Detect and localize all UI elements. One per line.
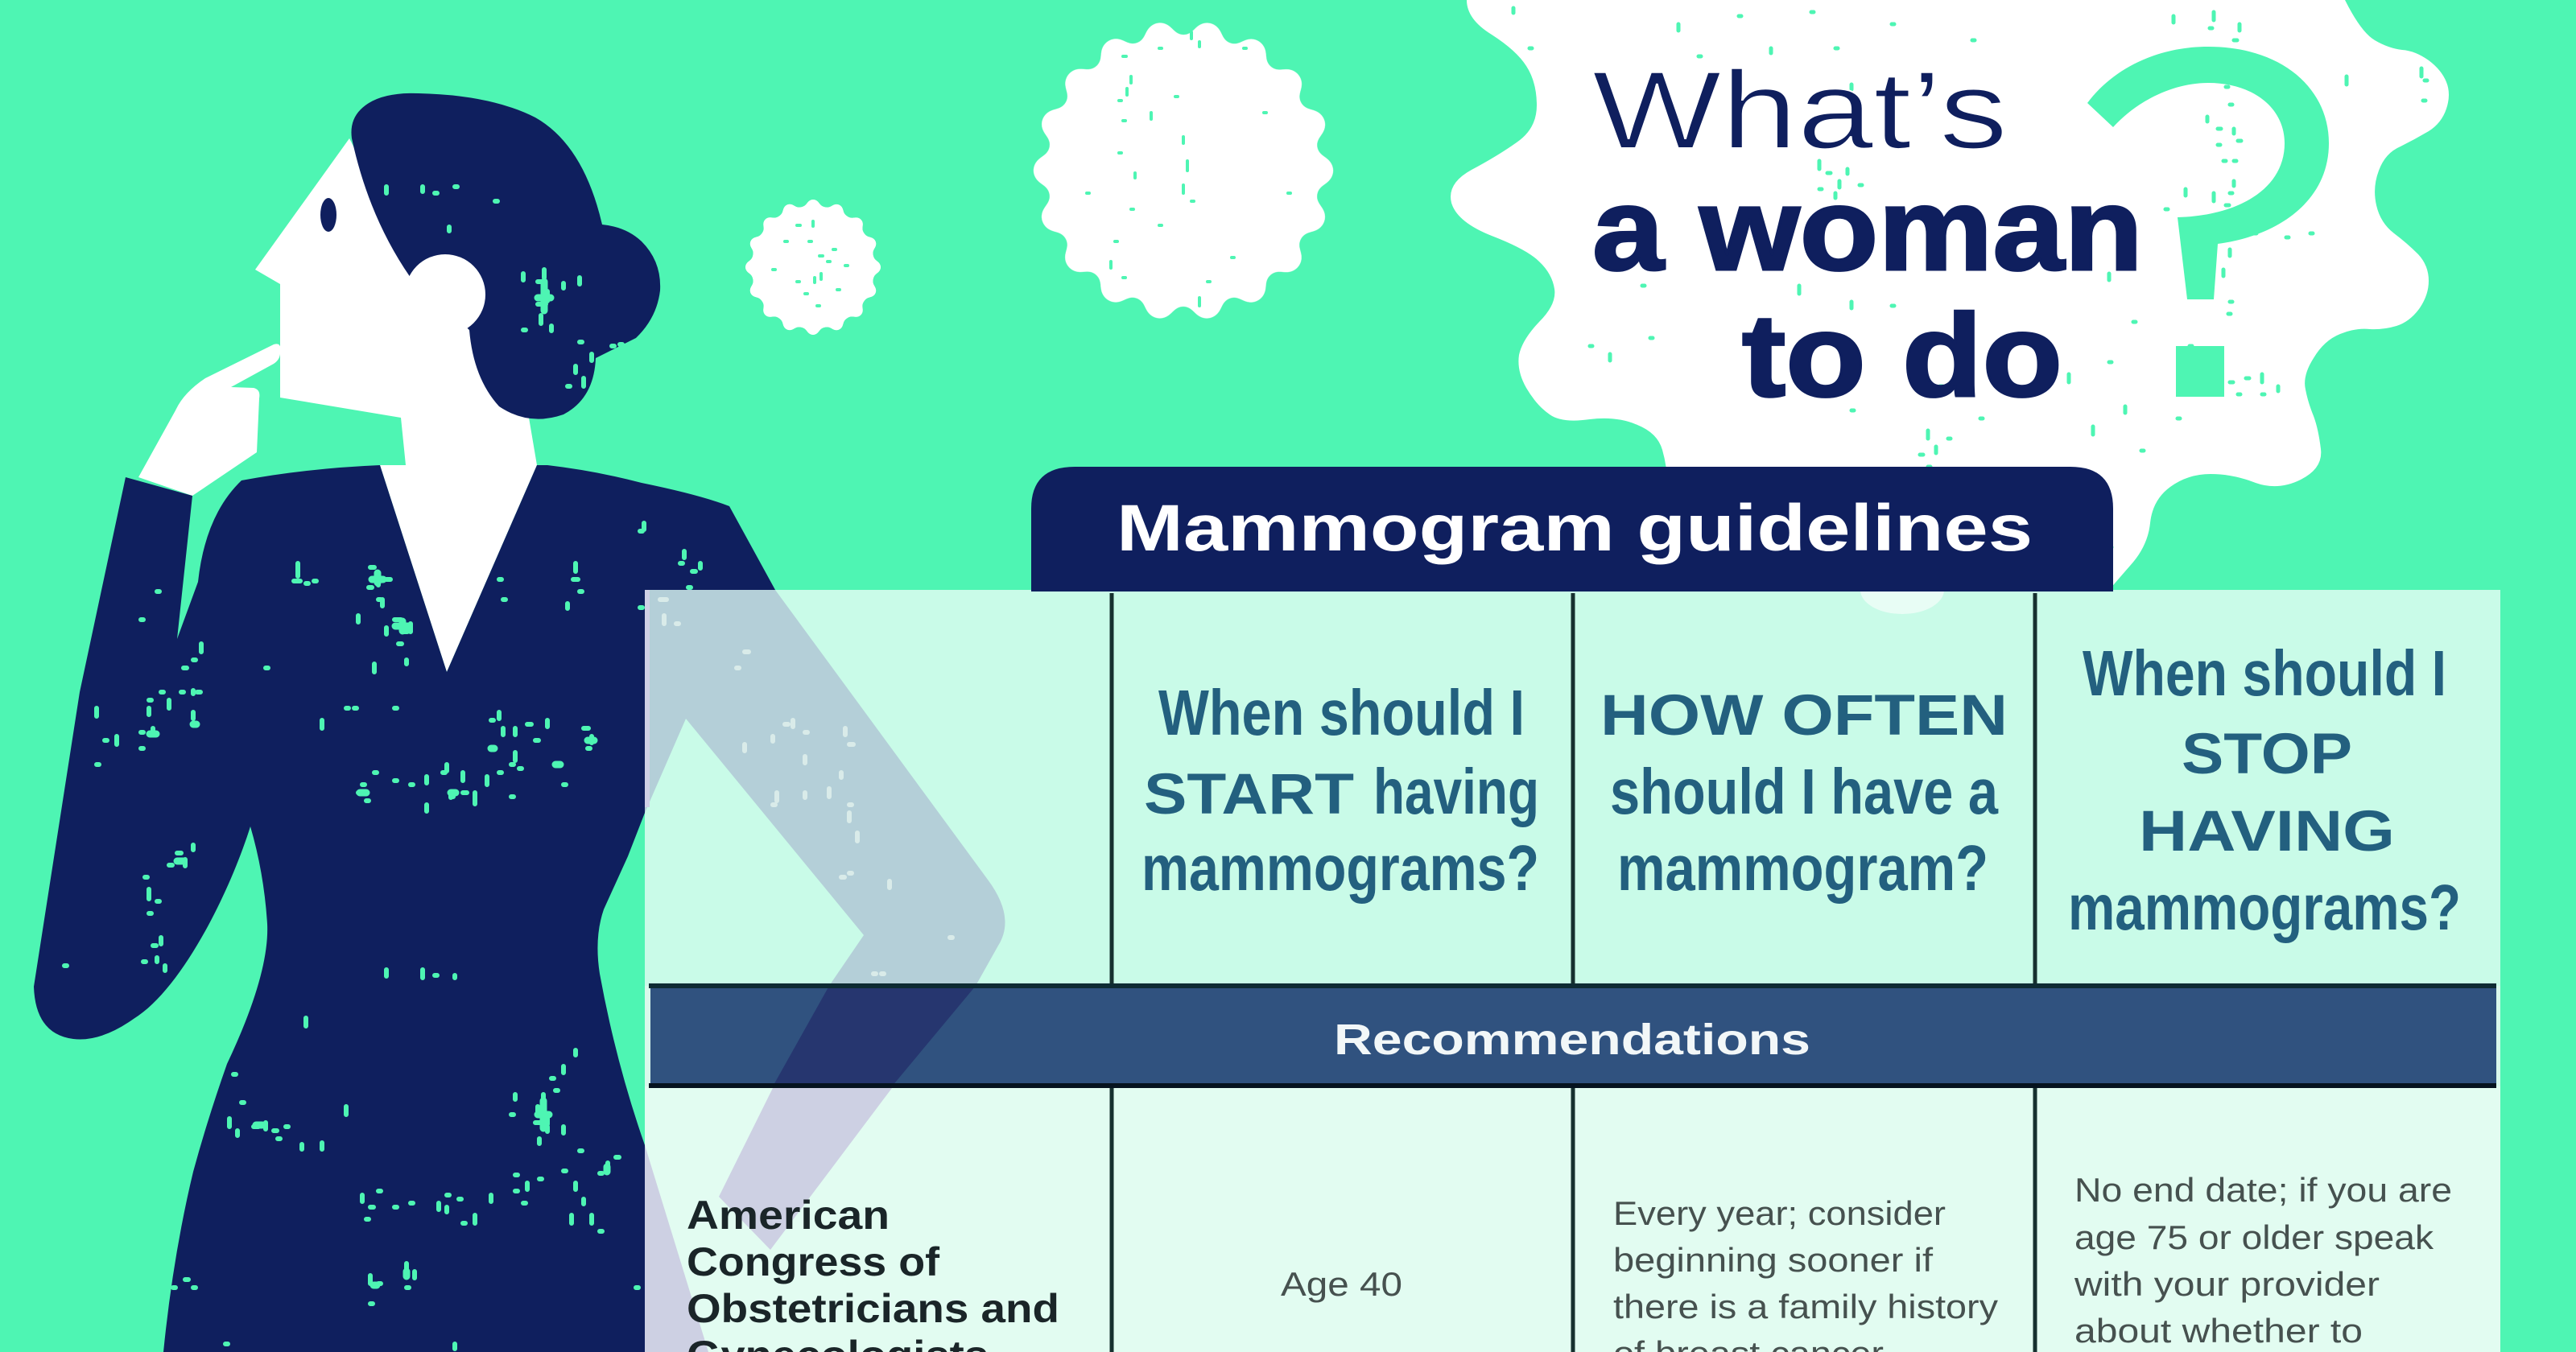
header: how often [1600,684,2008,904]
cell: how often: Every year; consider [1613,1194,1946,1232]
title: to do [1742,290,2062,421]
title [1592,49,2143,421]
column lines [1112,593,2035,1352]
row label: organization: Congress of [687,1239,939,1284]
band heading: recommendations: Recommendations [1334,1016,1810,1064]
header: when should I start: having [1373,756,1539,827]
cell: when to stop [2074,1171,2452,1350]
header: when should I stop: mammograms? [2068,872,2461,943]
dress [34,465,797,1352]
icon: large scalloped thought bubble [1048,32,1319,306]
panel: mammogram guidelines table [645,566,2500,1352]
speech cloud [1451,0,2449,600]
cell: when to stop: with your provider [2074,1265,2380,1303]
hair [351,93,660,419]
header: when should I start: START [1144,763,1354,826]
arm seen through table header [645,590,1005,986]
header: when should I start: mammograms? [1141,832,1539,904]
header: when should I stop: When should I [2083,637,2446,709]
arm seen through band [773,986,976,1086]
header: when should I stop: STOP [2182,723,2352,786]
table header background [645,590,2500,986]
cloud lobe seen through table [1860,566,1944,614]
table body background [645,1086,2500,1352]
cell: start age: Age 40 [1281,1265,1402,1303]
row label: organization: American [687,1193,890,1238]
lavender strip at table edge [645,590,650,807]
header: when should I start [1141,677,1539,904]
hand [138,344,280,496]
band lines [649,983,2496,988]
arm speckle [660,600,952,974]
cell: how often: there is a family history [1613,1288,1998,1325]
recommendations band [650,986,2496,1086]
icon: small scalloped thought bubble [752,206,874,328]
dense speckle clusters [150,282,607,1285]
cloud speckle texture [1513,8,2427,547]
icon: question mark [2087,47,2329,397]
tab: mammogram guidelines: Mammogram guidelines [1117,492,2033,565]
title: a woman [1592,163,2143,295]
title: What’s [1592,49,2008,172]
face and neck [255,138,537,672]
hip seen through table body [645,1145,708,1352]
dress and hair speckle texture [64,187,700,1349]
cell: how often: beginning sooner if [1613,1241,1933,1279]
forearm seen through table body [719,1088,892,1250]
tab: mammogram guidelines [1031,467,2113,592]
header: when should I start: When should I [1158,677,1525,748]
row label: organization: Obstetricians and [687,1286,1059,1331]
ear [405,254,485,335]
cell: how often [1613,1194,1998,1352]
header: how often: HOW OFTEN [1600,684,2008,748]
cell: when to stop: about whether to [2074,1312,2363,1350]
header: when should I stop [2068,637,2461,943]
band background [645,986,2500,1086]
header: how often: should I have a [1610,756,1998,827]
header: when should I stop: HAVING [2139,800,2395,864]
cell: when to stop: No end date; if you are [2074,1171,2452,1209]
row label: organization [687,1193,1059,1352]
header: how often: mammogram? [1617,832,1988,904]
cell: when to stop: age 75 or older speak [2074,1218,2434,1256]
illustration: woman [34,93,797,1352]
eye [320,198,336,232]
